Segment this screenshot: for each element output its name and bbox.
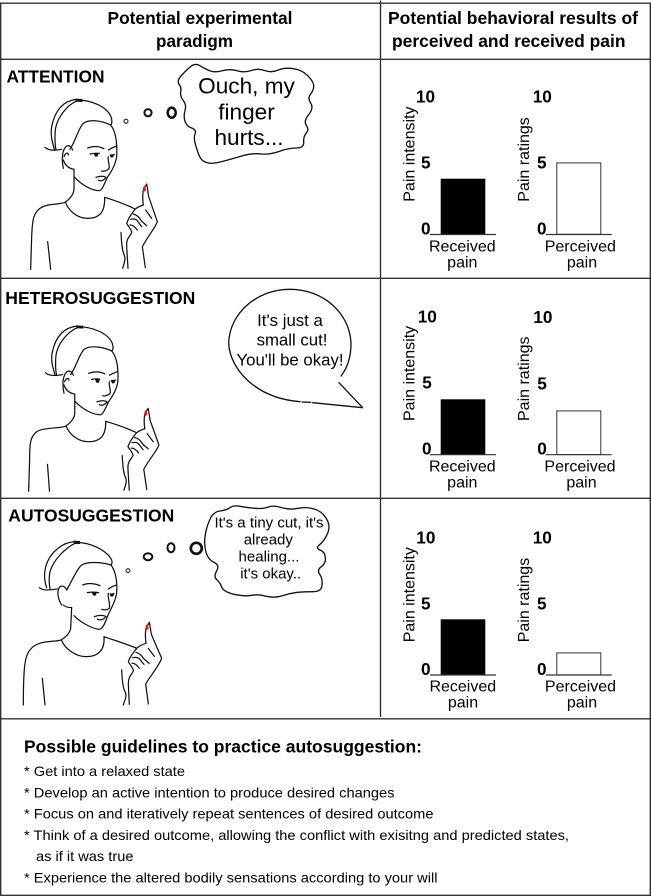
thought bubble: ouch: Ouch, my: [198, 73, 296, 98]
speech bubble: reassurance: [229, 289, 363, 408]
bar chart: received pain: 5: [421, 593, 431, 613]
guidelines heading: Possible guidelines to practice autosuggestion:: [24, 737, 422, 757]
bar chart: perceived pain: [516, 307, 616, 492]
bar chart: received pain: 10: [416, 86, 435, 106]
bar chart: perceived pain: pain: [567, 695, 597, 712]
label: attention: ATTENTION: [6, 67, 104, 87]
speech bubble: reassurance: You'll be okay!: [236, 351, 344, 370]
thought bubble: tiny cut: healing...: [239, 548, 299, 565]
bar chart: perceived pain: pain: [567, 254, 597, 271]
guidelines list: * Experience the altered bodily sensations according to your will: [24, 869, 438, 885]
heading: experimental paradigm column: paradigm: [156, 31, 233, 51]
guidelines list: * Think of a desired outcome, allowing the conflict with exisitng and predicted states,: [24, 827, 569, 843]
heading: behavioral results column: perceived and received pain: [392, 31, 626, 51]
label: autosuggestion: AUTOSUGGESTION: [8, 506, 174, 526]
illustration: woman thinking while looking at her finger: [23, 541, 162, 705]
guidelines list: * Get into a relaxed state: [24, 763, 185, 779]
illustration: woman looking at her cut finger: [31, 99, 157, 269]
bar chart: perceived pain: 0: [537, 219, 547, 239]
thought circles: [126, 543, 202, 573]
thought bubble: ouch: [178, 64, 314, 163]
bar chart: received pain: Pain intensity: [401, 547, 418, 642]
bar chart: received pain: [401, 86, 496, 271]
thought circles: [124, 108, 176, 123]
bar chart: received pain: Received: [429, 238, 496, 255]
bar chart: perceived pain: 10: [533, 307, 552, 327]
bar chart: received pain: Received: [429, 679, 496, 696]
thought bubble: tiny cut: it's okay..: [240, 565, 301, 582]
bar chart: received pain: pain: [448, 695, 478, 712]
bar chart: perceived pain: 0: [537, 439, 547, 459]
panel: attention paradigm: [6, 64, 616, 271]
illustration: woman listening while looking at her finger: [29, 325, 159, 491]
guidelines list: * Develop an active intention to produce desired changes: [24, 784, 394, 800]
bar chart: received pain: 5: [421, 153, 431, 173]
bar chart: received pain: 0: [421, 659, 431, 679]
heading: experimental paradigm column: Potential experimental: [108, 8, 292, 28]
thought bubble: tiny cut: already: [244, 531, 293, 548]
bar chart: received pain: [401, 528, 496, 712]
bar chart: received pain: 10: [418, 306, 437, 326]
heading: behavioral results column: Potential behavioral results of: [388, 8, 638, 28]
panel: heterosuggestion paradigm: [5, 288, 616, 492]
thought bubble: ouch: finger: [218, 99, 275, 124]
bar chart: received pain: 10: [416, 528, 435, 548]
bar chart: received pain: 0: [422, 439, 432, 459]
bar chart: perceived pain: Perceived: [545, 679, 616, 696]
guidelines list: [24, 763, 569, 885]
thought bubble: ouch: hurts...: [214, 125, 284, 150]
bar chart: perceived pain: 5: [537, 373, 547, 393]
speech bubble: reassurance: small cut!: [257, 331, 327, 350]
bar chart: perceived pain: [516, 86, 616, 271]
bar chart: received pain: 5: [422, 373, 432, 393]
heading: behavioral results column: [388, 8, 638, 51]
bar chart: perceived pain: pain: [566, 475, 597, 492]
thought bubble: tiny cut: [205, 506, 329, 597]
guidelines list: as if it was true: [36, 848, 134, 864]
bar chart: received pain: [401, 306, 496, 492]
bar chart: received pain: Received: [429, 459, 496, 476]
bar chart: perceived pain: 5: [537, 593, 547, 613]
label: heterosuggestion: HETEROSUGGESTION: [5, 288, 195, 308]
bar chart: perceived pain: Pain ratings: [516, 558, 533, 642]
bar chart: received pain: pain: [447, 475, 477, 492]
bar chart: perceived pain: 5: [537, 153, 547, 173]
bar chart: perceived pain: 10: [533, 86, 552, 106]
bar chart: received pain: 0: [421, 219, 431, 239]
heading: experimental paradigm column: [108, 8, 292, 51]
bar chart: received pain: Pain intensity: [401, 326, 418, 421]
guidelines list: * Focus on and iteratively repeat sentences of desired outcome: [24, 806, 434, 822]
bar chart: perceived pain: Perceived: [545, 238, 616, 255]
bar chart: perceived pain: Pain ratings: [516, 336, 533, 421]
panel: guidelines to practice autosuggestion: [24, 737, 569, 885]
speech bubble: reassurance: It's just a: [257, 311, 324, 330]
bar chart: received pain: Pain intensity: [401, 107, 418, 202]
bar chart: perceived pain: Perceived: [544, 459, 616, 476]
bar chart: perceived pain: [516, 528, 616, 712]
bar chart: perceived pain: Pain ratings: [516, 117, 533, 202]
bar chart: perceived pain: 0: [537, 659, 547, 679]
thought bubble: tiny cut: It's a tiny cut, it's: [214, 514, 324, 531]
panel: autosuggestion paradigm: [8, 506, 616, 712]
bar chart: perceived pain: 10: [533, 528, 552, 548]
bar chart: received pain: pain: [447, 254, 477, 271]
